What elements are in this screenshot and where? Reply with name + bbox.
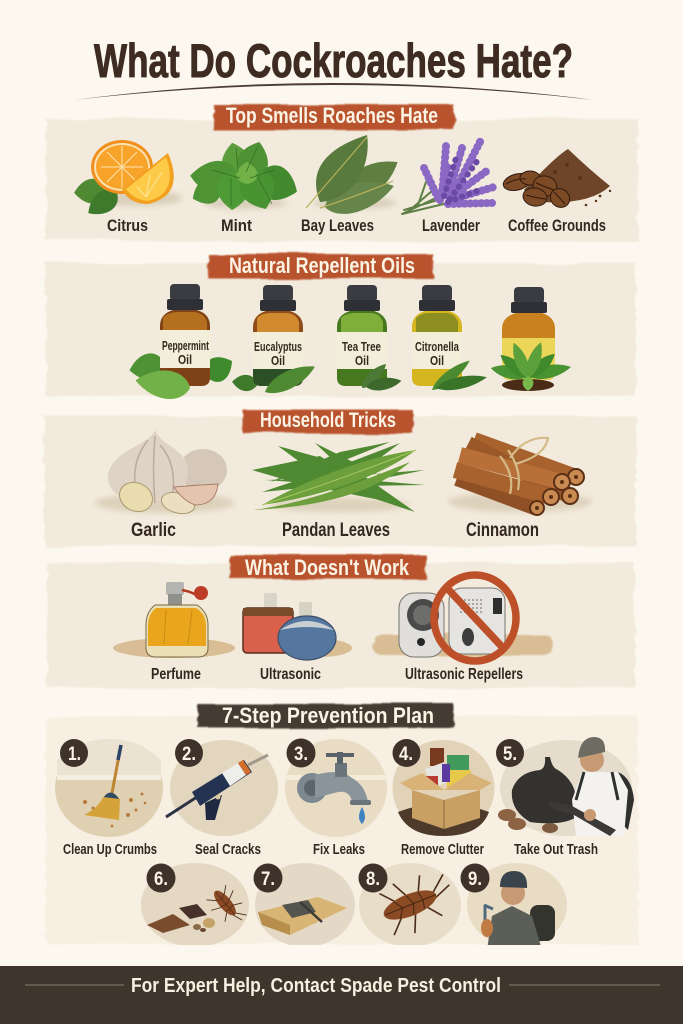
label: mint: Mint (221, 216, 252, 235)
bottle: tea tree oil: Tea Tree (342, 339, 381, 354)
step 2: seal cracks (166, 740, 278, 836)
panel: household tricks (44, 409, 636, 546)
label: cinnamon: Cinnamon (466, 520, 539, 541)
footer: For Expert Help, Contact Spade Pest Control (131, 975, 501, 997)
badges: step numbers: 7. (261, 869, 275, 890)
label: fix leaks: Fix Leaks (313, 842, 365, 858)
label: lavender: Lavender (422, 216, 480, 235)
label: clean up crumbs: Clean Up Crumbs (63, 842, 157, 858)
icon: coffee grounds (501, 149, 611, 211)
label: take out trash: Take Out Trash (514, 842, 598, 858)
step 6: droppings and roach (141, 863, 252, 947)
bottle: tea tree oil: Oil (355, 353, 369, 368)
bottle: peppermint oil: Oil (178, 352, 192, 367)
panel: what doesn't work (47, 555, 635, 688)
label: garlic: Garlic (131, 520, 176, 541)
badges: step numbers: 9. (468, 869, 482, 890)
icon: mint (188, 137, 303, 215)
bottle: citronella oil: Oil (430, 353, 444, 368)
bottle: citronella oil (412, 285, 488, 394)
title (74, 34, 594, 100)
step 3: fix leaks (285, 739, 387, 837)
panel: natural repellent oils (46, 253, 636, 402)
label: coffee grounds: Coffee Grounds (508, 216, 606, 235)
icon: perfume (113, 582, 235, 658)
bottle: tea tree oil (337, 285, 402, 393)
step 8: roach (359, 863, 461, 947)
icon: pandan leaves (252, 442, 425, 512)
heading: what doesn't work: What Doesn't Work (245, 555, 410, 580)
bottle: citronella oil: Citronella (415, 339, 460, 354)
footer (0, 966, 683, 1024)
label: bay leaves: Bay Leaves (301, 216, 374, 235)
badges: step numbers: 1. (68, 744, 81, 765)
label: citrus: Citrus (107, 216, 148, 235)
label: perfume: Perfume (151, 666, 201, 683)
icon: lavender (402, 140, 494, 214)
bottle: peppermint oil: Peppermint (162, 338, 209, 353)
badges: step numbers: 5. (503, 744, 517, 765)
lower steps clipped row (141, 863, 567, 950)
icon: garlic (95, 430, 235, 517)
heading: household tricks: Household Tricks (260, 409, 396, 432)
badges: step numbers: 3. (294, 744, 308, 765)
panel: prevention plan (46, 703, 638, 950)
panel: top smells (46, 103, 638, 241)
icon: ultrasonic repellers crossed out (373, 575, 553, 661)
step 7: trap (255, 863, 355, 947)
step 5: take out trash (498, 737, 634, 836)
heading: repellent oils: Natural Repellent Oils (229, 253, 415, 278)
prohibition sign (434, 575, 516, 661)
label: ultrasonic repellers: Ultrasonic Repellers (405, 666, 523, 683)
bottle: eucalyptus oil: Oil (271, 353, 285, 368)
label: ultrasonic: Ultrasonic (260, 666, 321, 683)
badges: step numbers: 6. (154, 869, 168, 890)
bottle: peppermint oil (127, 284, 238, 402)
bottle: eucalyptus oil: Eucalyptus (254, 339, 302, 354)
icon: perfume bottles labelled ultrasonic (243, 593, 352, 660)
badges: step numbers: 4. (399, 744, 413, 765)
heading: prevention plan: 7-Step Prevention Plan (222, 703, 434, 728)
heading: top smells: Top Smells Roaches Hate (226, 103, 438, 128)
badges: step numbers (60, 738, 524, 892)
label: pandan leaves: Pandan Leaves (282, 520, 390, 541)
bottle: eucalyptus oil (231, 285, 319, 400)
icon: citrus (73, 140, 182, 222)
label: remove clutter: Remove Clutter (401, 842, 484, 858)
icon: bay leaves (306, 135, 405, 220)
badges: step numbers: 2. (182, 744, 196, 765)
bottle: unlabelled oil with leaves (489, 287, 572, 391)
step 4: remove clutter (392, 740, 494, 836)
badges: step numbers: 8. (366, 869, 380, 890)
icon: cinnamon (448, 438, 592, 515)
step 9: technician (467, 863, 567, 950)
step 1: clean up crumbs (55, 739, 163, 837)
label: seal cracks: Seal Cracks (195, 842, 261, 858)
